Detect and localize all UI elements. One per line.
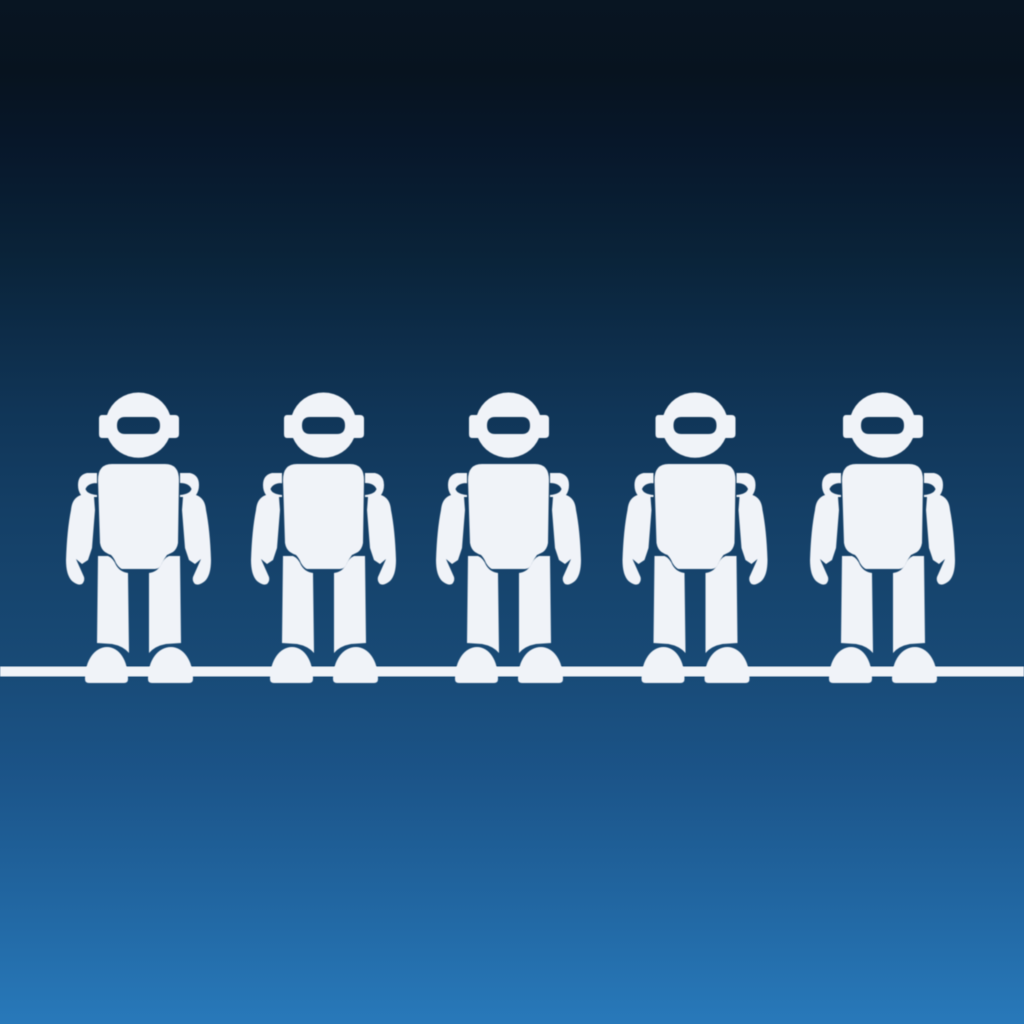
ground line xyxy=(0,666,1024,676)
robot 3 xyxy=(436,393,581,683)
robot 4 xyxy=(622,393,768,683)
robot 1 xyxy=(66,393,211,683)
robot 5 xyxy=(810,393,955,683)
robot 2 xyxy=(251,393,396,683)
